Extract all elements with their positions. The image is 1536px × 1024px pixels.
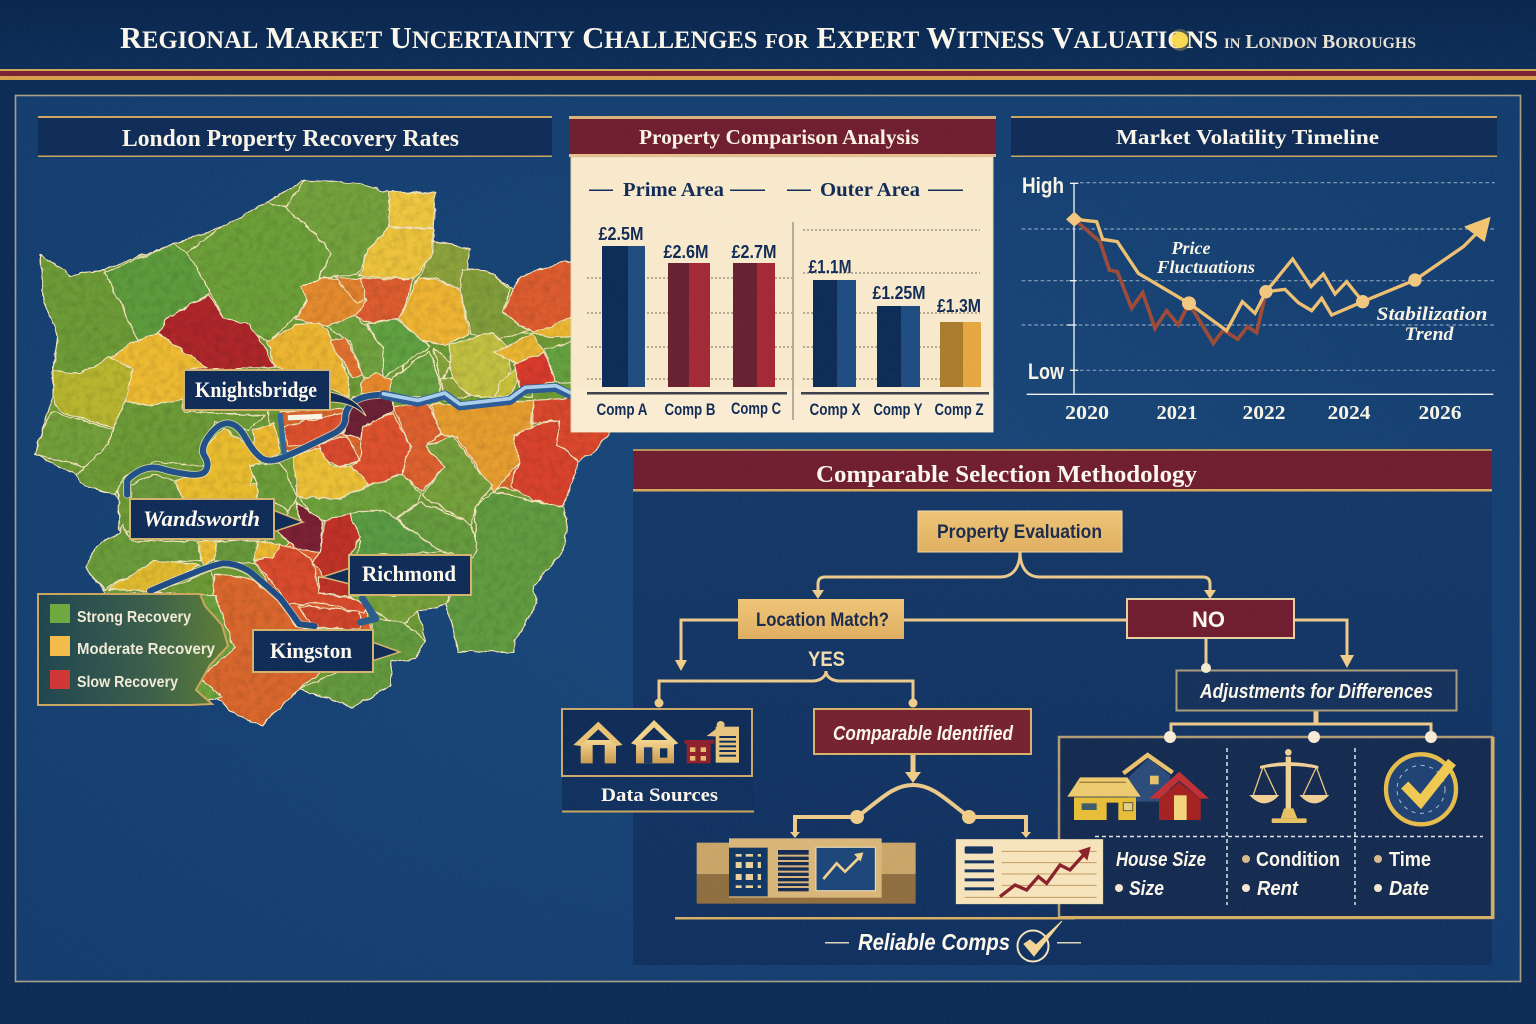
legend label: moderate: Moderate Recovery xyxy=(77,641,215,658)
icon: scales xyxy=(1249,749,1329,823)
bar axis labels: Comp Z xyxy=(934,400,984,419)
icon: report chart xyxy=(956,839,1103,904)
callout: Richmond xyxy=(322,555,471,595)
icon: check badge xyxy=(1386,754,1456,824)
group label: prime area: Prime Area xyxy=(623,179,724,201)
legend swatch: moderate xyxy=(50,636,70,656)
bar: Comp Y xyxy=(872,283,926,387)
legend swatch: slow xyxy=(50,670,70,689)
comparison heading xyxy=(569,116,996,157)
legend xyxy=(38,594,228,705)
callout: Wandsworth xyxy=(130,499,303,539)
step: comparable identified: Comparable Identified xyxy=(833,723,1014,745)
series: outer prices xyxy=(1075,219,1477,331)
methodology heading: Comparable Selection Methodology xyxy=(816,462,1197,488)
axis label: High: High xyxy=(1022,173,1064,198)
factor text: house size xyxy=(1115,849,1206,900)
annotation: price fluctuations: Price xyxy=(1170,238,1211,258)
legend label: strong: Strong Recovery xyxy=(77,609,191,626)
title: IN LONDON BOROUGHS xyxy=(1224,31,1416,53)
data points xyxy=(1066,212,1422,310)
conclusion: reliable comps xyxy=(825,921,1081,962)
bar axis labels: Comp X xyxy=(810,400,861,419)
bar: Comp C xyxy=(732,242,776,387)
trend arrowhead xyxy=(1464,217,1491,242)
year labels: 2022 xyxy=(1242,402,1286,424)
step: comparable identified xyxy=(814,709,1031,754)
factor text: condition xyxy=(1242,849,1340,900)
timeline heading: Market Volatility Timeline xyxy=(1116,125,1379,149)
methodology heading xyxy=(633,449,1492,492)
comparison heading: Property Comparison Analysis xyxy=(639,125,919,149)
map of London boroughs xyxy=(35,180,609,726)
panel: map heading: London Property Recovery Rates xyxy=(122,126,459,152)
bar: Comp Z xyxy=(937,296,981,387)
callout: Richmond: Richmond xyxy=(362,561,456,586)
bar axis labels: Comp B xyxy=(664,400,716,419)
annotation: stabilization trend xyxy=(1376,304,1488,345)
step: property evaluation xyxy=(918,511,1122,552)
bar: Comp X xyxy=(808,257,856,387)
annotation: price fluctuations: Fluctuations xyxy=(1156,257,1255,277)
step: location match: Location Match? xyxy=(756,610,889,631)
conclusion: reliable comps: Reliable Comps xyxy=(858,929,1010,955)
panel: market volatility timeline xyxy=(1011,116,1497,424)
annotation: price fluctuations xyxy=(1156,238,1255,277)
annotation: stabilization trend: Stabilization xyxy=(1376,304,1488,325)
callout: Wandsworth: Wandsworth xyxy=(143,506,260,531)
comparison card xyxy=(571,157,993,432)
bar: Comp B: £2.6M xyxy=(664,242,708,262)
step: property evaluation: Property Evaluation xyxy=(937,522,1102,543)
icon: reliable check xyxy=(1018,921,1062,962)
panel: adjustment factors xyxy=(1059,737,1493,918)
step: NO xyxy=(1127,599,1294,638)
bar axis labels: Comp Y xyxy=(874,400,923,419)
panel: property comparison xyxy=(569,116,996,432)
callout: Knightsbridge: Knightsbridge xyxy=(195,377,317,402)
legend swatch: strong xyxy=(50,604,70,623)
factor text: time xyxy=(1374,849,1431,900)
flow connectors xyxy=(659,552,1431,832)
line chart xyxy=(1022,183,1495,394)
year labels: 2024 xyxy=(1328,402,1370,424)
label: YES: YES xyxy=(808,648,845,671)
bar axis labels xyxy=(596,399,984,419)
header band xyxy=(0,0,1536,80)
bar: Comp A xyxy=(598,224,645,387)
factor text: time: Date xyxy=(1389,878,1429,900)
step: adjustments: Adjustments for Differences xyxy=(1199,681,1433,703)
annotation: stabilization trend: Trend xyxy=(1404,324,1454,345)
icon: houses xyxy=(1067,755,1209,820)
year labels: 2021 xyxy=(1156,402,1198,424)
icon: title sun glint xyxy=(1169,29,1191,51)
year labels: 2020 xyxy=(1065,402,1109,424)
panel: comparable selection methodology xyxy=(562,449,1493,965)
bar axis labels: Comp A xyxy=(596,400,648,419)
year labels xyxy=(1065,402,1462,424)
bar: Comp X: £1.1M xyxy=(808,257,852,277)
factor text: house size: Size xyxy=(1129,878,1164,900)
step: location match xyxy=(738,599,904,639)
bar: Comp Y: £1.25M xyxy=(872,283,926,303)
timeline heading xyxy=(1011,116,1497,157)
bar: Comp A: £2.5M xyxy=(598,224,644,244)
series: prime prices xyxy=(1075,220,1266,343)
factor text: time: Time xyxy=(1389,849,1431,871)
callout: Knightsbridge xyxy=(184,370,366,416)
factor text: condition: Rent xyxy=(1257,878,1299,900)
river Thames xyxy=(127,386,575,627)
icons: houses and documents xyxy=(573,720,739,763)
callout: Kingston: Kingston xyxy=(270,638,352,663)
axis label: Low: Low xyxy=(1028,359,1065,384)
data sources label: Data Sources xyxy=(601,785,718,806)
step: adjustments xyxy=(1176,670,1456,710)
legend label: slow: Slow Recovery xyxy=(77,674,178,691)
callout: Kingston xyxy=(253,630,400,672)
bar: Comp C: £2.7M xyxy=(732,242,776,262)
divider: reliable comps rule xyxy=(675,917,1075,920)
title: REGIONAL MARKET UNCERTAINTY CHALLENGES FOR EXPERT WITNESS VALUATIONS xyxy=(120,20,1218,55)
year labels: 2026 xyxy=(1418,402,1462,424)
panel: map heading xyxy=(38,116,552,157)
panel: data sources xyxy=(562,709,754,812)
factor text: house size: House Size xyxy=(1116,849,1206,871)
step: NO: NO xyxy=(1192,607,1225,632)
factor text: condition: Condition xyxy=(1256,849,1340,871)
bar: Comp Z: £1.3M xyxy=(937,296,981,316)
group label: outer area: Outer Area xyxy=(820,179,920,201)
bar axis labels: Comp C xyxy=(731,399,781,418)
flow arrowheads and nodes xyxy=(654,590,1437,838)
bar: Comp B xyxy=(664,242,710,387)
icon: comparison dashboard xyxy=(697,838,916,904)
